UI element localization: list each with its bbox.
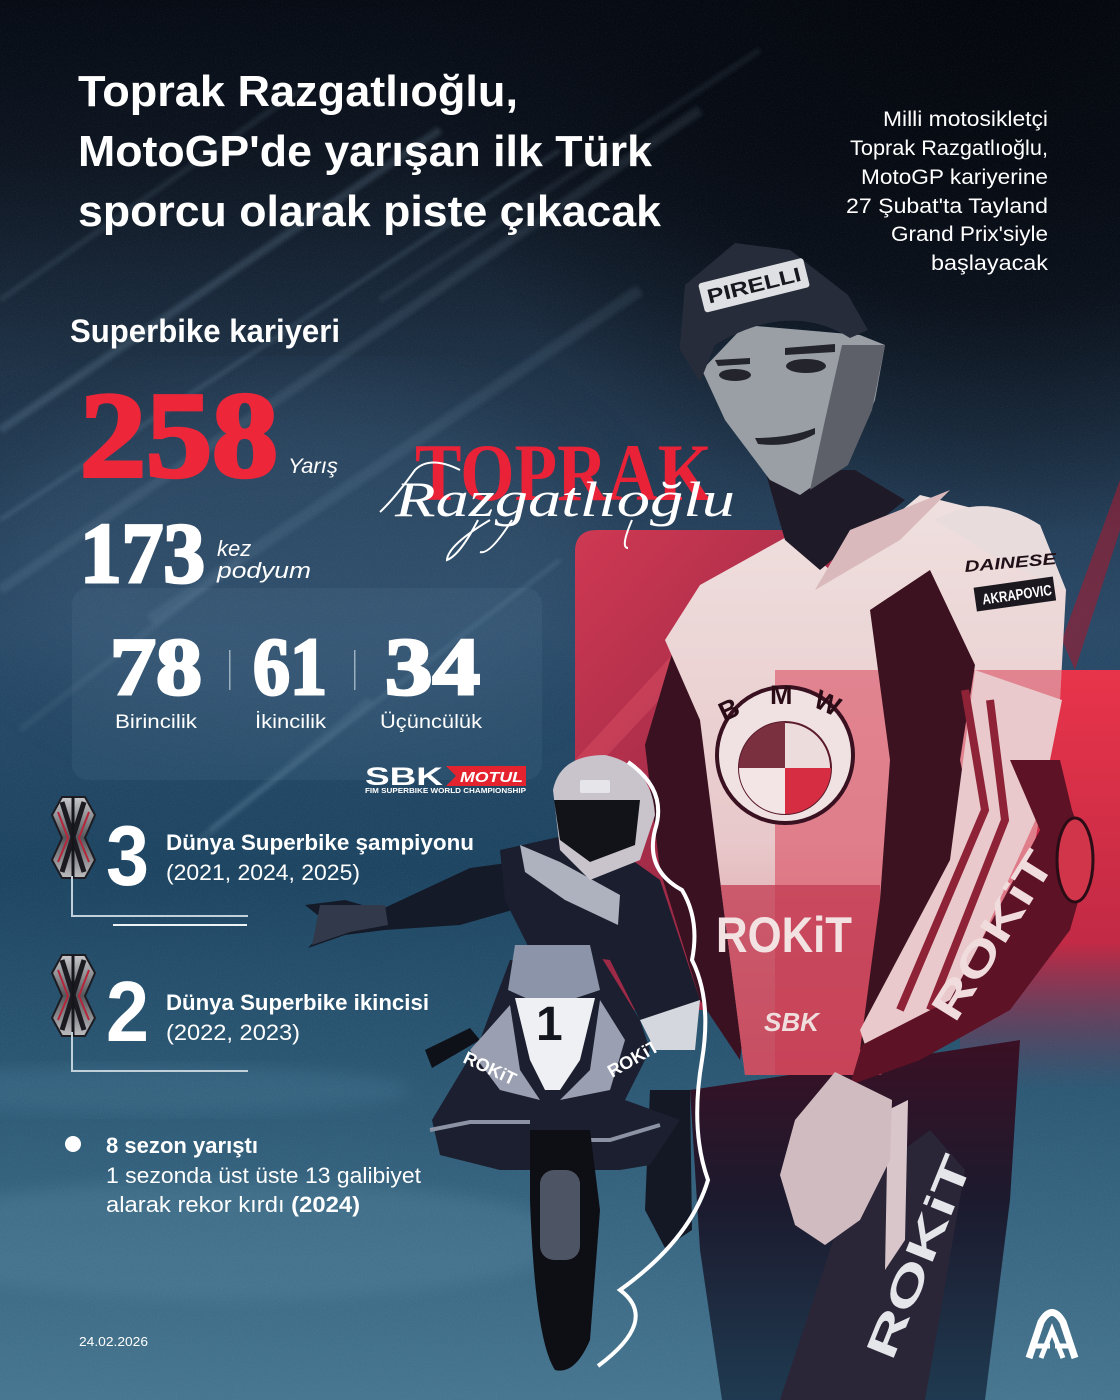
elbow guard [850,760,1090,1085]
face shadow [810,345,885,490]
stats: first, second, third [110,621,482,733]
championship text: Dünya Superbike şampiyonu [166,830,474,855]
elbow slider [1057,818,1093,902]
date: 24.02.2026 [79,1334,148,1349]
rider body [500,830,700,1040]
rider torso suit [665,495,1066,1075]
bullet [65,1136,81,1152]
leg sponsor: ROKiT [857,1148,981,1365]
name: Razgatlıoğlu script [380,462,735,560]
championship text [166,830,474,885]
collar [815,490,950,590]
leg white stripe [885,1100,908,1270]
title: MotoGP'de yarışan ilk Türk [78,127,653,176]
stats: first, second, third: İkincilik [255,710,326,733]
runner-up text [166,990,429,1045]
translucent stats panel [72,588,542,780]
shoulder brand: DAINESE [964,551,1059,576]
runner-up text: Dünya Superbike ikincisi [166,990,429,1015]
name: Razgatlıoğlu script: Razgatlıoğlu [394,471,735,527]
AA logo [1029,1312,1075,1358]
intro text: 27 Şubat'ta Tayland [846,194,1048,218]
cap brand patch: PIRELLI [705,264,804,308]
shoulder armour [935,506,1066,590]
rider legs [690,1040,1020,1400]
championship text: (2021, 2024, 2025) [166,860,360,885]
record text [106,1133,421,1217]
brake guards [430,1122,660,1140]
SBK Motul logo: MOTUL [460,769,523,786]
record text: 8 sezon yarıştı [106,1133,258,1158]
intro text: MotoGP kariyerine [861,165,1048,189]
fork and wheel [530,1130,600,1371]
stat: 258 races: 258 [80,368,278,503]
bike sponsor right: ROKiT [604,1036,662,1081]
stat: 173 podiums: podyum [216,558,311,583]
intro text [846,107,1048,275]
intro text: Toprak Razgatlıoğlu, [850,136,1048,160]
stat: 258 races: Yarış [288,455,339,478]
stats: first, second, third: Üçüncülük [380,711,482,733]
white outline curve [598,762,708,1366]
medal 2 [52,955,95,1036]
shoulder sponsor [974,577,1056,611]
title [78,67,662,236]
red tint on suit [720,670,1062,1075]
SBK Motul logo [365,763,526,795]
title count: 3: 3 [106,809,149,904]
handlebar and levers [425,1028,480,1068]
stats: first, second, third: 61 [253,621,327,712]
SBK Motul logo: FIM SUPERBIKE WORLD CHAMPIONSHIP [365,786,526,795]
title: sporcu olarak piste çıkacak [78,187,662,236]
runner-up text: (2022, 2023) [166,1020,300,1045]
chest sponsor: ROKiT [716,907,852,963]
name: Toprak: TOPRAK [415,427,712,518]
stats: first, second, third: Birincilik [115,711,197,733]
rear boot [645,1090,692,1248]
BMW logo: W [809,684,846,722]
rider glove details [312,905,388,945]
number plate [515,998,595,1090]
stats: first, second, third: 78 [110,621,202,712]
title: Toprak Razgatlıoğlu, [78,67,518,116]
record text: alarak rekor kırdı (2024) [106,1192,360,1217]
sleeve sponsor: ROKiT [922,842,1064,1029]
bracket lines 1 [72,876,248,925]
cap [680,243,868,382]
title count: 2: 2 [106,965,149,1060]
windscreen [508,945,600,1000]
stat: 173 podiums: kez [217,536,251,561]
rider arm [305,860,530,948]
rider left arm [645,620,760,1060]
SBK Motul logo: SBK [365,763,443,791]
intro text: başlayacak [931,251,1048,275]
suit white panels [520,845,620,925]
helmet visor [554,800,640,862]
intro text: Milli motosikletçi [883,107,1048,131]
medal 1 [52,797,95,878]
rider hand and lever [640,1000,700,1050]
bike rider [305,755,700,1371]
stats: first, second, third: 34 [385,621,480,712]
bracket lines 2 [72,1032,248,1071]
hand [780,1072,892,1245]
suit dark shoulder panel [860,570,985,1050]
neck [765,470,905,570]
bike body [432,955,680,1170]
section heading: Superbike kariyeri [70,313,340,349]
cap brand patch [698,258,810,313]
shoulder sponsor: AKRAPOVIC [981,582,1053,609]
intro text: Grand Prix'siyle [891,222,1048,246]
record text: 1 sezonda üst üste 13 galibiyet [106,1163,421,1188]
sleeve stripes [900,690,1005,1010]
helmet [553,755,655,880]
bike sponsors: ROKiT [460,1047,520,1089]
face [702,325,885,495]
stat: 173 podiums: 173 [80,505,205,601]
eyes and mouth [715,344,835,445]
right sleeve [860,670,1062,1060]
BMW logo: B [714,692,744,727]
wheel highlight [540,1170,580,1260]
stat: 173 podiums [80,505,311,601]
BMW logo: M [770,680,792,710]
main rider portrait [645,243,1120,1400]
helmet brand [580,780,610,793]
BMW logo [714,680,853,823]
race number: 1 [536,998,563,1051]
fairing light panels [470,1000,625,1100]
SBK badge: SBK [764,1007,821,1037]
leg highlight [780,1130,965,1400]
red background panel [575,480,1120,1090]
